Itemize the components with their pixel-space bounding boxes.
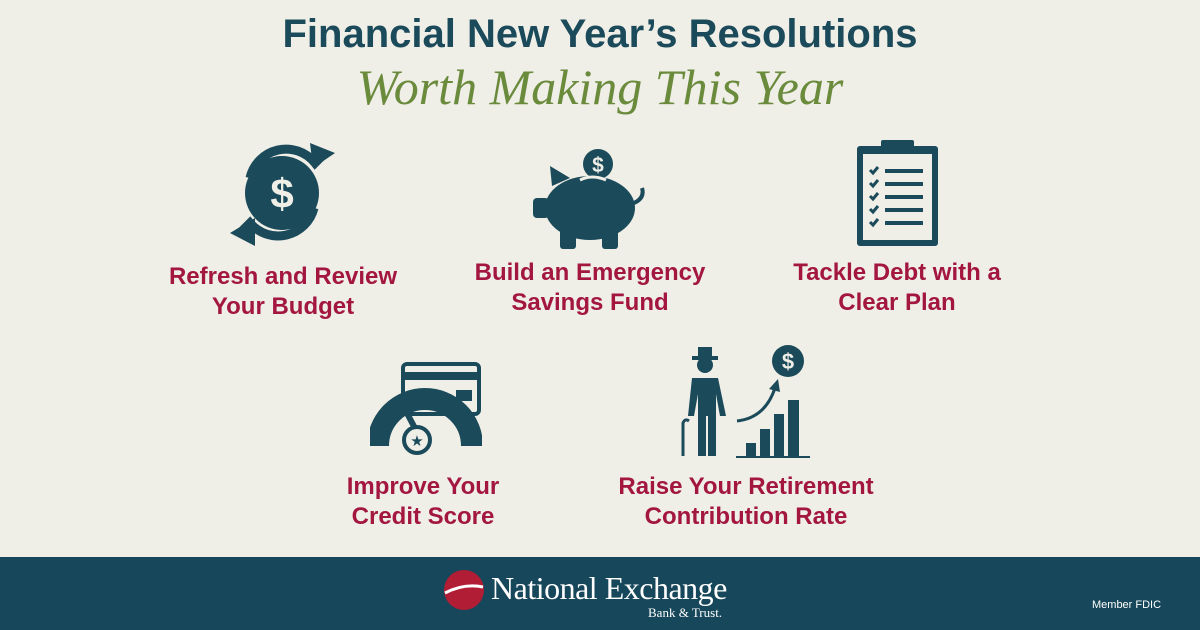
- footer: [0, 557, 1200, 630]
- subtitle: Worth Making This Year: [357, 59, 843, 115]
- label: emergency: [475, 259, 706, 316]
- logo: [444, 570, 727, 620]
- logo: National Exchange: [491, 570, 727, 606]
- icon: retirement: $: [782, 349, 794, 374]
- icon: budget refresh: [230, 143, 335, 246]
- label: retirement: Contribution Rate: [645, 503, 847, 530]
- label: emergency: Build an Emergency: [475, 259, 705, 286]
- label: credit: Improve Your: [347, 473, 499, 500]
- label: budget: Your Budget: [212, 293, 354, 320]
- icon: budget refresh: $: [270, 170, 294, 217]
- label: credit: Credit Score: [352, 503, 494, 530]
- label: debt: Clear Plan: [838, 289, 956, 316]
- label: emergency: Savings Fund: [511, 289, 669, 316]
- label: debt: Tackle Debt with a: [793, 259, 1001, 286]
- member fdic: Member FDIC: [1092, 599, 1161, 611]
- label: retirement: Raise Your Retirement: [618, 473, 874, 500]
- icon: clipboard: [857, 140, 938, 246]
- label: budget: Refresh and Review: [169, 263, 397, 290]
- icon: piggy bank: [533, 149, 645, 249]
- label: debt: [793, 259, 1001, 316]
- icon: credit score: [370, 362, 482, 455]
- label: credit: [347, 473, 499, 530]
- label: budget: [169, 263, 398, 320]
- icon: credit score: ★: [410, 433, 424, 450]
- label: retirement: [618, 473, 874, 530]
- title: Financial New Year’s Resolutions: [282, 12, 918, 56]
- logo: Bank & Trust.: [648, 605, 722, 620]
- icon: piggy bank: $: [592, 154, 604, 177]
- icon: retirement: [682, 345, 810, 458]
